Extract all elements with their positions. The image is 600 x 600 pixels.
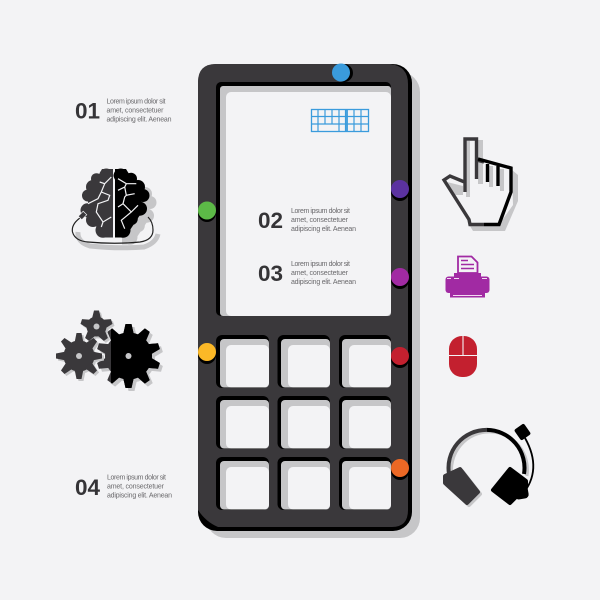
description 03: adipiscing elit. Aenean [291,279,356,286]
text block 01 [75,98,172,124]
description 01: adipiscing elit. Aenean [106,116,172,124]
number 03: 03 [258,261,283,286]
number 04: 04 [75,475,101,500]
description 03: Lorem ipsum dolor sit [291,261,350,268]
keypad buttons [216,335,391,510]
icon: printer [446,256,490,298]
description 01: amet, consectetuer [106,108,164,114]
icon: gears [56,310,164,391]
text block 03 [258,261,356,286]
description 04: Lorem ipsum dolor sit [107,474,166,482]
description 04: adipiscing elit. Aenean [107,492,172,500]
description 03: amet, consectetuer [291,270,349,277]
phone device [198,64,420,538]
description 02: amet, consectetuer [291,217,349,224]
description 04: amet, consectetuer [107,484,165,490]
text block 02 [258,208,356,233]
icon: headset [445,423,533,505]
description 01: Lorem ipsum dolor sit [106,98,166,106]
icon: mouse [449,336,477,377]
phone black edge [198,64,412,531]
icon: keyboard [312,110,368,132]
text block 04 [75,474,172,500]
phone screen [216,82,391,316]
description 02: Lorem ipsum dolor sit [291,208,350,215]
description 02: adipiscing elit. Aenean [291,226,356,233]
phone body [198,64,408,527]
icon: pointing hand cursor [444,139,518,231]
number 02: 02 [258,208,283,233]
icon: brain with cord [72,168,158,248]
phone drop shadow [206,72,420,538]
coloured connector dots [198,64,409,480]
number 01: 01 [75,98,100,124]
